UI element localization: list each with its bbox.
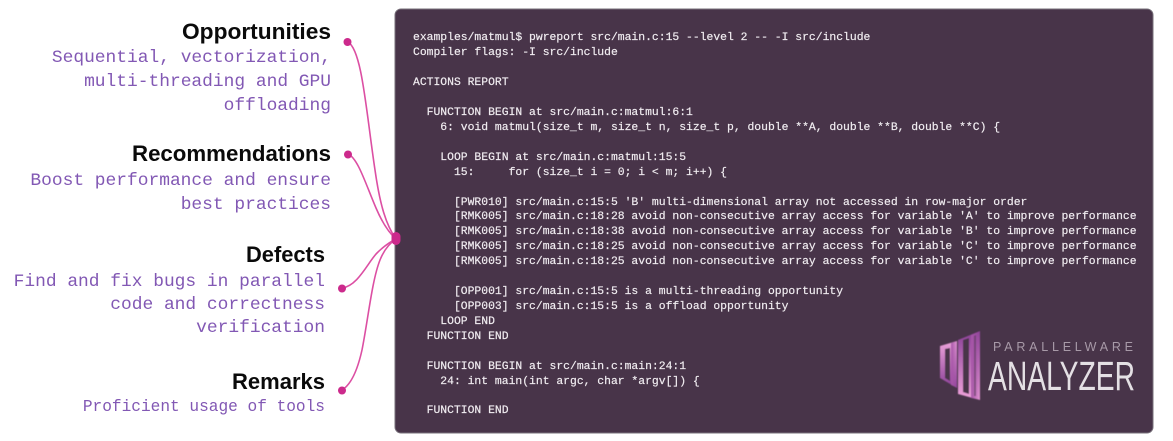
terminal text: LOOP END: [413, 316, 495, 328]
terminal text: Compiler flags: -I src/include: [413, 47, 618, 59]
connector dots: [338, 38, 352, 394]
terminal text: ACTIONS REPORT: [413, 77, 509, 89]
terminal text: LOOP BEGIN at src/main.c:matmul:15:5: [413, 152, 686, 164]
terminal text: [RMK005] src/main.c:18:25 avoid non-consecutive array access for variable 'C' to improve performance: [413, 241, 1137, 253]
terminal text: FUNCTION BEGIN at src/main.c:matmul:6:1: [413, 107, 693, 119]
terminal text: 15: for (size_t i = 0; i < m; i++) {: [413, 167, 727, 179]
heading: opportunities: Opportunities: [182, 19, 331, 44]
text block: recommendations: [30, 141, 331, 215]
description: defects: code and correctness: [110, 295, 325, 315]
description: defects: verification: [196, 318, 325, 338]
terminal text: [RMK005] src/main.c:18:25 avoid non-consecutive array access for variable 'C' to improve performance: [413, 256, 1137, 268]
heading: remarks: Remarks: [232, 369, 325, 394]
description: defects: Find and fix bugs in parallel: [14, 272, 325, 292]
terminal text: [RMK005] src/main.c:18:28 avoid non-consecutive array access for variable 'A' to improve performance: [413, 211, 1137, 223]
terminal text: [PWR010] src/main.c:15:5 'B' multi-dimensional array not accessed in row-major order: [413, 197, 1027, 209]
description: opportunities: Sequential, vectorization,: [52, 48, 331, 68]
terminal text: FUNCTION END: [413, 405, 509, 417]
description: recommendations: [30, 171, 331, 215]
description: defects: [14, 272, 325, 338]
terminal text: FUNCTION END: [413, 331, 509, 343]
description: opportunities: offloading: [224, 96, 331, 116]
heading: defects: Defects: [246, 242, 325, 267]
panel: terminal output: [395, 9, 1153, 433]
terminal text: [413, 32, 1137, 417]
terminal text: examples/matmul$ pwreport src/main.c:15 --level 2 -- -I src/include: [413, 32, 871, 44]
description: opportunities: multi-threading and GPU: [84, 72, 331, 92]
connector curves: [342, 42, 396, 390]
connector hub: [392, 232, 400, 245]
logo text: parallelware: PARALLELWARE: [993, 340, 1133, 354]
text block: remarks: [83, 369, 325, 416]
description: recommendations: best practices: [181, 195, 331, 215]
logo: Parallelware Analyzer: [940, 331, 1135, 400]
text block: defects: [14, 242, 325, 338]
description: remarks: Proficient usage of tools: [83, 398, 325, 416]
terminal text: [RMK005] src/main.c:18:38 avoid non-consecutive array access for variable 'B' to improve performance: [413, 226, 1137, 238]
icon: logo bars: [940, 331, 980, 400]
terminal text: 6: void matmul(size_t m, size_t n, size_t p, double **A, double **B, double **C) {: [413, 122, 1000, 134]
text block: opportunities: [52, 19, 331, 116]
heading: recommendations: Recommendations: [132, 141, 331, 166]
terminal text: [OPP003] src/main.c:15:5 is a offload opportunity: [413, 301, 789, 313]
terminal text: [OPP001] src/main.c:15:5 is a multi-threading opportunity: [413, 286, 843, 298]
description: recommendations: Boost performance and ensure: [30, 171, 331, 191]
description: opportunities: [52, 48, 331, 116]
terminal text: FUNCTION BEGIN at src/main.c:main:24:1: [413, 361, 686, 373]
terminal text: 24: int main(int argc, char *argv[]) {: [413, 376, 700, 388]
